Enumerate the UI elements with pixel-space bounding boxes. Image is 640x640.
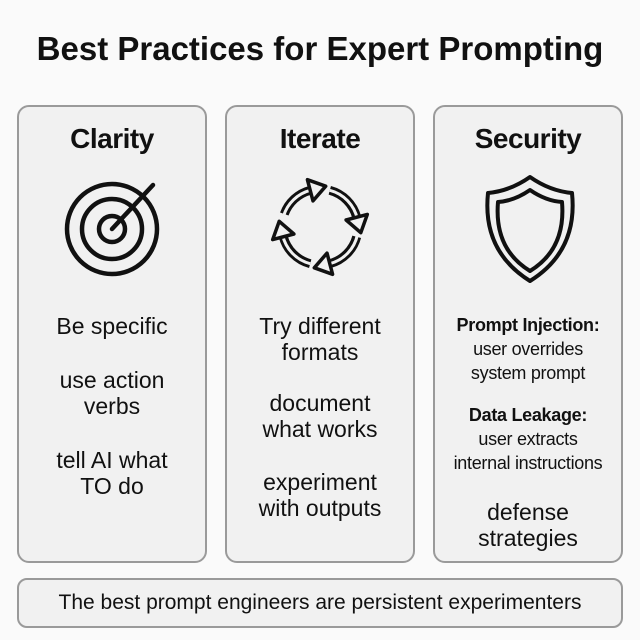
text: iterate points: formats: [282, 339, 358, 365]
heading: security: Security: [475, 123, 581, 154]
heading: clarity: Clarity: [70, 123, 154, 154]
panel: security: [433, 105, 623, 563]
icon: cycle arrows: [270, 178, 370, 276]
panel: clarity: use action: [60, 367, 164, 393]
footer callout: [17, 578, 623, 628]
panel: iterate: experiment: [263, 469, 377, 495]
panel: clarity: TO do: [80, 473, 144, 499]
icon: target: [64, 182, 160, 276]
panel: clarity: verbs: [84, 393, 140, 419]
title: Best Practices for Expert Prompting: [37, 30, 603, 67]
text: iterate points: [259, 313, 381, 365]
panel: security: internal instructions: [454, 453, 602, 473]
heading: iterate: Iterate: [280, 123, 360, 154]
text: clarity points: Be specific: [56, 313, 168, 339]
panel: clarity: tell AI what: [56, 447, 168, 473]
text: security points: Prompt Injection:: [457, 315, 599, 335]
text: security points: [457, 315, 599, 383]
text: security points: user overrides: [473, 339, 583, 359]
panel: clarity: [17, 105, 207, 563]
panel: iterate: document: [269, 390, 370, 416]
panel: security: strategies: [478, 525, 578, 551]
text: iterate points: Try different: [259, 313, 381, 339]
panel: iterate: [225, 105, 415, 563]
icon: shield: [485, 175, 575, 283]
panel: security: user extracts: [478, 429, 578, 449]
panel: iterate: what works: [262, 416, 378, 442]
text: security points: system prompt: [471, 363, 585, 383]
footer callout: The best prompt engineers are persistent experimenters: [59, 591, 581, 614]
panel: security: Data Leakage:: [469, 405, 587, 425]
panel: iterate: with outputs: [259, 495, 381, 521]
panel: security: defense: [487, 499, 569, 525]
